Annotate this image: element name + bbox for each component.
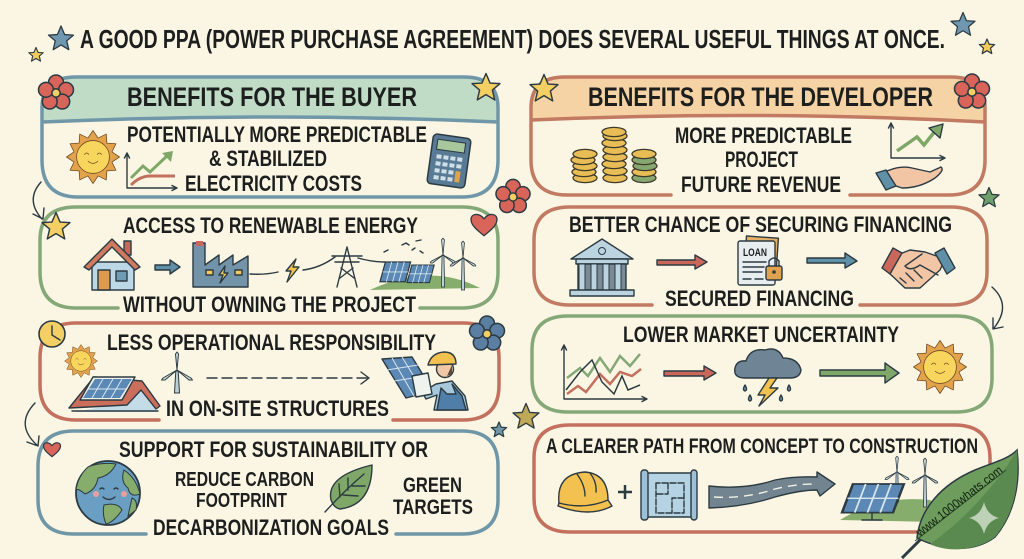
support closing line: DECARBONIZATION GOALS [153,515,389,540]
icon: volatile chart [562,345,647,402]
icon: handshake [882,248,955,288]
power line and bolt [250,257,385,282]
watermark url: www.1000whats.com [913,463,1005,540]
icon: factory [193,241,248,287]
panel: benefits for the buyer [42,77,498,197]
text: reduce carbon footprint: FOOTPRINT [196,490,287,512]
icon: solar site [840,456,950,522]
watermark leaf [902,450,1018,558]
icon: bank [570,239,634,296]
access heading: ACCESS TO RENEWABLE ENERGY [123,213,418,238]
text: reduce carbon footprint [175,469,314,512]
decorations: access panel [42,212,497,239]
text: reduce carbon footprint: REDUCE CARBON [175,469,314,491]
developer header band [531,77,985,122]
icon: sun [914,340,966,394]
arrow: chart to storm [664,366,716,380]
icon: loan document [738,236,782,285]
icon: small sun [64,344,98,378]
panel: lower market uncertainty [532,316,992,412]
decorations: operations panel [39,316,504,350]
arrow: developer step two to three [992,287,1003,329]
panel: less operational responsibility [40,323,499,421]
developer heading: BENEFITS FOR THE DEVELOPER [588,82,933,112]
icon: house [84,239,140,290]
decoration: olive star [513,404,539,428]
buyer benefit text [127,122,427,196]
icon: hard hat [558,472,612,512]
arrow: buyer step one to two [33,182,44,219]
icon: clock [39,321,65,347]
icon: calculator [427,134,471,188]
developer benefit text: PROJECT [725,147,798,172]
icon: cost chart [124,151,177,190]
icon: coin stacks [571,127,657,183]
icon: sun [66,130,120,184]
decorations: support panel [44,422,507,457]
panel: better chance of securing financing [534,207,987,311]
panel: support for sustainability [38,431,498,540]
operations closing line: IN ON-SITE STRUCTURES [166,396,389,421]
icon: storm cloud [735,349,801,406]
icon: solar farm [370,238,480,290]
support heading: SUPPORT FOR SUSTAINABILITY OR [119,437,428,462]
operations heading: LESS OPERATIONAL RESPONSIBILITY [107,330,436,355]
buyer benefit text: POTENTIALLY MORE PREDICTABLE [127,122,427,147]
buyer header band [42,77,498,122]
text: green targets [393,474,473,519]
icon: loan document: LOAN [743,247,767,259]
arrow: winding road [709,472,835,508]
panel: clearer path from concept to construction [534,425,990,532]
decorations: buyer header [39,74,500,109]
arrow: buyer step three to four [25,403,39,446]
icon: leaf [325,465,372,512]
developer benefit text [675,123,852,197]
icon: rooftop solar [69,377,160,412]
icon: open hand [876,167,942,190]
developer benefit text: FUTURE REVENUE [681,172,841,197]
icon: revenue chart [888,123,945,160]
icon: wind turbine [162,352,192,393]
panel: access to renewable energy [40,207,498,317]
icon: smiling earth [76,461,140,525]
icon: worker inspecting panel [382,352,468,410]
arrow: loan to handshake [807,253,857,268]
decorations: developer header [530,74,999,207]
decoration: flower centre [496,179,530,213]
text: green targets: TARGETS [393,496,473,519]
arrow: storm to sun [820,363,899,383]
access closing line: WITHOUT OWNING THE PROJECT [123,292,416,317]
financing closing line: SECURED FINANCING [665,286,854,311]
market heading: LOWER MARKET UNCERTAINTY [623,322,899,347]
arrow: bank to loan [657,255,707,269]
buyer heading: BENEFITS FOR THE BUYER [127,82,417,112]
arrow: house to factory [155,260,180,274]
buyer benefit text: & STABILIZED [209,146,327,171]
decorative stars near title [29,12,995,61]
buyer benefit text: ELECTRICITY COSTS [185,171,362,196]
panel: benefits for the developer [531,77,985,197]
icon: pylon [332,247,362,287]
dashed arrow [207,372,369,384]
icon: plus sign [618,485,632,499]
developer benefit text: MORE PREDICTABLE [675,123,852,148]
text: green targets: GREEN [403,474,462,497]
icon: blueprint [641,470,697,520]
